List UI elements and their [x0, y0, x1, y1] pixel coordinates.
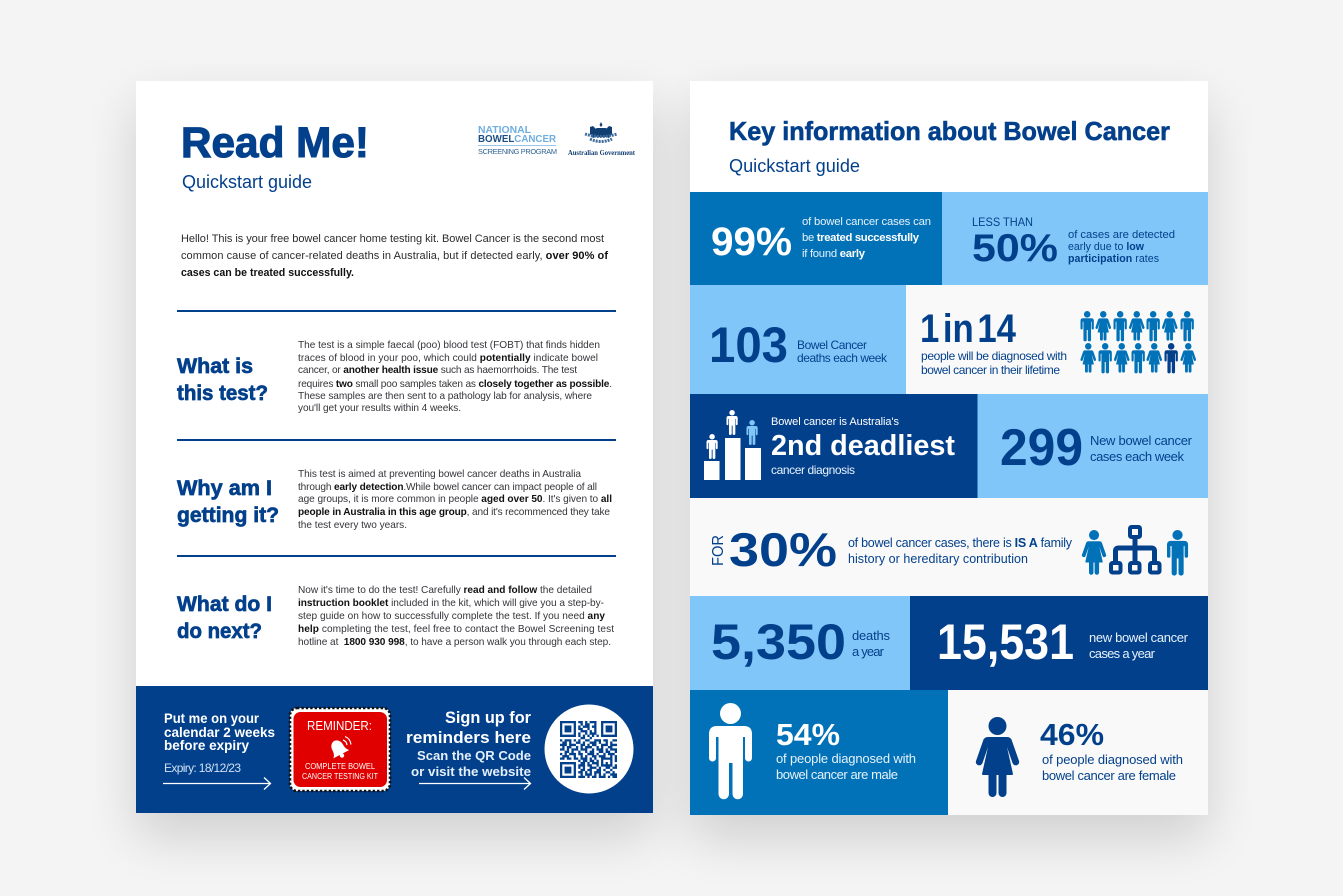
title: Key information about Bowel Cancer [729, 116, 1170, 146]
section: What do I do next? [177, 585, 614, 648]
QR code [544, 704, 634, 794]
tile: less than 50% [942, 192, 1208, 285]
body text: the test every two years. [298, 520, 407, 531]
tile: 46% female: bowel cancer are female [1042, 768, 1176, 783]
body text [298, 340, 612, 414]
icon: podium [704, 410, 761, 480]
reminder stamp: REMINDER: [307, 719, 372, 733]
calendar note: calendar 2 weeks [164, 724, 275, 740]
body text: requires two small poo samples taken as closely together as possible. [298, 379, 612, 390]
subtitle: Quickstart guide [182, 172, 312, 192]
tile: 5,350 deaths [690, 596, 910, 690]
intro text: Hello! This is your free bowel cancer home testing kit. Bowel Cancer is the second most [181, 233, 604, 245]
body text: through early detection.While bowel cancer can impact people of all [298, 482, 597, 493]
tile: 30% family history: of bowel cancer cases, there is IS A family [848, 536, 1073, 550]
icon: bell [326, 736, 351, 762]
body text: instruction booklet included in the kit, which will give you a step-by- [298, 598, 604, 609]
icon array: people [1080, 311, 1196, 373]
logo: Australian Government crest: Australian Government [568, 148, 635, 157]
icon: man [1167, 530, 1188, 576]
tile: 99% [690, 192, 942, 285]
tile: 5,350 deaths: deaths [852, 628, 890, 643]
logo: National Bowel Cancer Screening Program: NATIONAL [478, 125, 531, 136]
tile: 5,350 deaths: 5,350 [711, 614, 846, 670]
tile: 99%: if found early [802, 248, 866, 260]
body text: you'll get your results within 4 weeks. [298, 403, 461, 414]
heading: What is [177, 354, 253, 378]
body text: traces of blood in your poo, which could potentially indicate bowel [298, 353, 598, 364]
tile: 2nd deadliest: cancer diagnosis [771, 463, 855, 477]
tile: 299 new cases: New bowel cancer [1090, 433, 1193, 448]
intro text: cases can be treated successfully. [181, 267, 354, 279]
heading: this test? [177, 381, 268, 405]
section: Why am I getting it? [177, 469, 612, 531]
calendar note [164, 710, 275, 775]
body text [298, 585, 614, 648]
tile: 99%: of bowel cancer cases can [802, 216, 931, 228]
panel: Read Me quickstart page [136, 81, 653, 813]
tile: 30% family history: FOR [710, 535, 727, 566]
heading: What do I [177, 592, 272, 616]
tile: 54% male: 54% [776, 717, 840, 752]
logo: National Bowel Cancer Screening Program [478, 125, 557, 156]
body text: people in Australia in this age group, and it's recommenced they take [298, 507, 610, 518]
tile: 30% family history: 30% [729, 523, 837, 576]
heading: do next? [177, 619, 262, 643]
tile: less than 50%: participation rates [1068, 253, 1159, 265]
tile: less than 50%: LESS THAN [972, 215, 1033, 229]
arrow [419, 778, 530, 790]
tile: less than 50%: 50% [972, 227, 1058, 270]
heading: Why am I [177, 476, 272, 500]
body text: hotline at 1800 930 998, to have a person walk you through each step. [298, 637, 611, 648]
icon: woman [976, 717, 1019, 797]
intro text [181, 233, 608, 279]
logo: Australian Government crest [568, 122, 635, 157]
tile: 15,531 new cases: cases a year [1089, 646, 1156, 661]
body text: age groups, it is more common in people aged over 50. It's given to all [298, 494, 612, 505]
tile: 5,350 deaths: a year [852, 644, 885, 659]
sign up text: reminders here [406, 729, 531, 747]
footer banner [136, 686, 653, 813]
tile: 103 deaths: deaths each week [797, 351, 888, 365]
heading [177, 354, 268, 405]
subtitle: Quickstart guide [729, 156, 860, 176]
tile: 15,531 new cases: 15,531 [937, 614, 1074, 670]
tile: 103 deaths: 103 [709, 317, 788, 373]
sign up text: or visit the website [411, 764, 531, 779]
body text: step guide on how to successfully complete the test. If you need any [298, 611, 605, 622]
body text: help completing the test, feel free to contact the Bowel Screening test [298, 624, 614, 635]
heading [177, 476, 279, 527]
heading [177, 592, 272, 643]
tile: 1 in 14: people will be diagnosed with [921, 349, 1067, 363]
body text: These samples are then sent to a pathology lab for analysis, where [298, 391, 592, 402]
intro text: common cause of cancer-related deaths in Australia, but if detected early, over 90% of [181, 250, 608, 262]
tile: 2nd deadliest [690, 394, 978, 498]
body text: Now it's time to do the test! Carefully read and follow the detailed [298, 585, 592, 596]
tile: less than 50%: of cases are detected [1068, 229, 1175, 241]
title: Read Me!: Read Me! [181, 120, 369, 167]
arrow [163, 778, 270, 790]
tile: 299 new cases: 299 [1000, 419, 1083, 477]
sign up text: Sign up for [445, 709, 532, 727]
sign up text [406, 709, 532, 779]
tile: 15,531 new cases: new bowel cancer [1089, 630, 1189, 645]
panel: Key information page [690, 81, 1208, 815]
section: What is this test? [177, 340, 612, 414]
tile: 54% male [690, 690, 948, 815]
reminder stamp: COMPLETE BOWEL [305, 762, 376, 771]
icon: family tree [1111, 527, 1160, 572]
logo: National Bowel Cancer Screening Program: BOWELCANCER [478, 134, 557, 145]
body text: This test is aimed at preventing bowel cancer deaths in Australia [298, 469, 581, 480]
icon: woman [1082, 530, 1106, 575]
calendar note: Expiry: 18/12/23 [164, 761, 241, 775]
tile: 103 deaths: Bowel Cancer [797, 338, 867, 352]
heading: getting it? [177, 503, 279, 527]
tile: 99%: 99% [711, 220, 792, 264]
reminder stamp: CANCER TESTING KIT [302, 772, 378, 781]
tile: 1 in 14 [906, 285, 1208, 394]
tile: 299 new cases: cases each week [1090, 449, 1184, 464]
icon: man [709, 703, 752, 799]
tile: 54% male: bowel cancer are male [776, 767, 898, 782]
tile: 46% female: 46% [1040, 717, 1104, 752]
tile: 103 deaths [690, 285, 906, 394]
logo: National Bowel Cancer Screening Program: SCREENING PROGRAM [478, 147, 557, 156]
tile: 46% female: of people diagnosed with [1042, 752, 1183, 767]
body text: cancer, or another health issue such as haemorrhoids. The test [298, 365, 577, 376]
tile: 30% family history: history or hereditary contribution [848, 552, 1028, 566]
tile: 2nd deadliest: Bowel cancer is Australia's [771, 416, 900, 428]
calendar note: Put me on your [164, 710, 260, 726]
body text: The test is a simple faecal (poo) blood test (FOBT) that finds hidden [298, 340, 600, 351]
calendar note: before expiry [164, 737, 249, 753]
sign up text: Scan the QR Code [417, 748, 531, 763]
tile: 99%: be treated successfully [802, 232, 920, 244]
tile: 1 in 14: 1 in 14 [920, 307, 1017, 351]
tile: 54% male: of people diagnosed with [776, 751, 916, 766]
tile: 1 in 14: bowel cancer in their lifetime [921, 363, 1060, 377]
tile: 46% female [948, 690, 1208, 815]
tile: 299 new cases [978, 394, 1208, 498]
tile: 2nd deadliest: 2nd deadliest [771, 430, 955, 462]
tile: 15,531 new cases [910, 596, 1208, 690]
tile: 30% family history [690, 498, 1208, 596]
body text [298, 469, 612, 531]
tile: less than 50%: early due to low [1068, 241, 1145, 253]
reminder stamp [290, 708, 390, 791]
